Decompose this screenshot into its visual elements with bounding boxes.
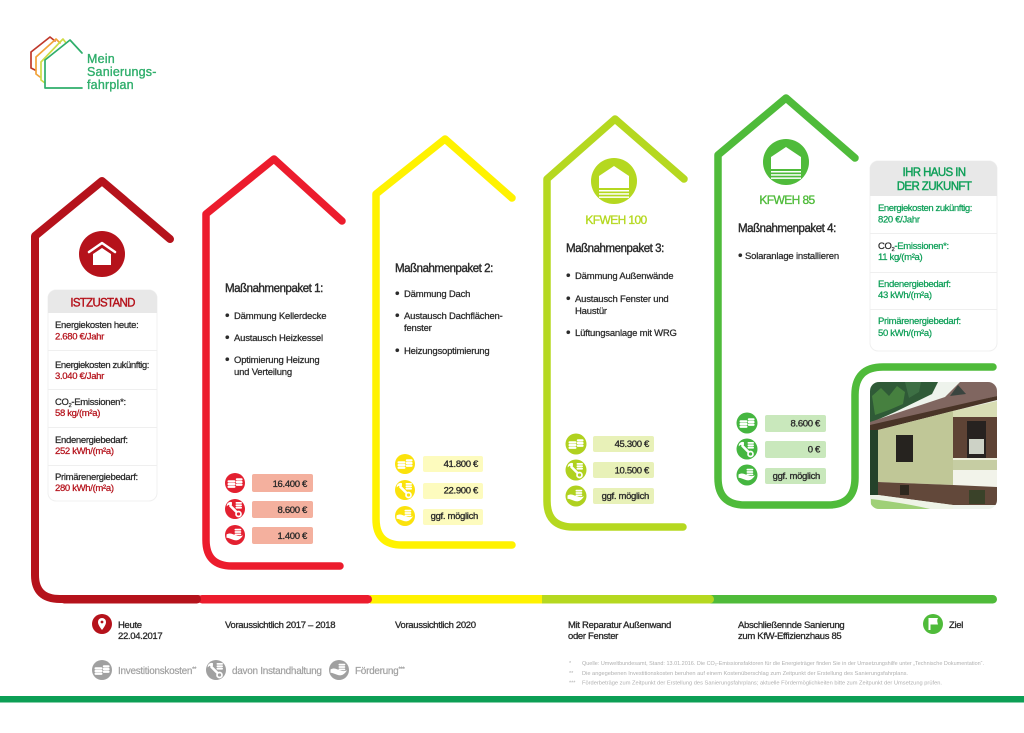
panel: package 3 [566,158,677,506]
cost: maintenance [395,480,483,500]
row: CO2: 58 kg/(m²a) [55,408,100,419]
measures list: Dämmung Außenwände [575,271,673,282]
cost: subsidy: 1.400 € [278,531,308,542]
timeline: package 1 date: Voraussichtlich 2017 – 2018 [225,620,335,631]
house outline: package 1 [206,159,342,566]
row: primary energy: 280 kWh/(m²a) [55,483,114,494]
footnotes: Förderbeträge zum Zeitpunkt der Erstellung des Sanierungsfahrplans; aktuelle Fördermöglichkeiten bitte zum Zeitpunkt der Umsetzung prüfen. [582,680,942,686]
measures list [225,308,326,378]
row: final energy: 252 kWh/(m²a) [55,446,114,457]
row: primary energy: Primärenergiebedarf: [878,316,961,327]
row: CO2: CO [55,397,69,408]
measures list: Solaranlage installieren [745,251,839,262]
measures list: Austausch Heizkessel [234,333,323,344]
row: future energy cost: 3.040 €/Jahr [55,371,104,382]
row: final energy [55,435,128,457]
panel heading: ISTZUSTAND [70,298,135,310]
row: energy cost today [55,320,138,342]
row: final energy: Endenergiebedarf: [55,435,128,446]
cost: investment: 16.400 € [273,479,308,490]
row: future energy cost [55,360,149,382]
measures list: • [225,352,230,366]
cost: subsidy [395,506,483,526]
house outline: package 4 [718,98,993,505]
cost: maintenance [225,499,313,519]
measures list [738,248,839,262]
panel: current state [48,290,157,501]
measures list: • [395,308,400,322]
row: energy cost today: Energiekosten heute: [55,320,138,331]
measures list: Lüftungsanlage mit WRG [575,328,677,339]
cost: investment [566,434,654,454]
cost: subsidy [736,464,826,486]
measures list: • [395,286,400,300]
timeline: today: 22.04.2017 [118,631,162,642]
row: primary energy: 50 kWh/(m²a) [878,328,932,339]
panel: future house [870,161,997,351]
cost: investment: 8.600 € [791,418,821,430]
cost: subsidy [225,525,313,545]
measures list: • [566,268,571,282]
row: CO2: -Emissionen*: [894,241,949,252]
legend: investment: ** [192,667,197,673]
measures list: • [566,290,571,306]
house outline: package 3 [547,119,684,527]
cost: maintenance: 0 € [808,444,821,456]
house outline: package 2 [376,139,512,545]
legend: subsidy: Förderung [355,666,398,677]
row: primary energy: Primärenergiebedarf: [55,472,138,483]
row: CO2 [878,241,949,263]
row: final energy [878,279,951,301]
measures list: Heizungsoptimierung [404,346,489,357]
measures list: und Verteilung [234,367,292,378]
cost: investment [736,412,826,434]
timeline: package 3 date [568,620,671,642]
measures list: • [225,308,230,322]
cost: subsidy: ggf. möglich [431,511,478,522]
cost: subsidy: ggf. möglich [773,471,820,482]
icon: efficiency house 100 [591,158,637,204]
heading: Maßnahmenpaket 1: [225,283,323,295]
panel: package 1 [225,283,326,545]
measures list [566,268,677,340]
measures list: Dämmung Kellerdecke [234,311,326,322]
heading: Maßnahmenpaket 2: [395,263,493,275]
measures list [395,286,503,358]
measures list: • [225,330,230,344]
timeline: package 4 date: Abschließennde Sanierung [738,620,844,631]
timeline: package 2 date: Voraussichtlich 2020 [395,620,476,631]
row: future energy cost: Energiekosten zukünftig: [878,203,972,214]
measures list: Optimierung Heizung [234,355,319,366]
timeline: package 3 date: Mit Reparatur Außenwand [568,620,671,631]
footnotes: ** [569,671,574,677]
footnotes: *** [569,680,576,686]
row: energy cost today: 2.680 €/Jahr [55,332,104,342]
house outline: current state [35,181,198,599]
icon: location pin [92,614,112,634]
measures list: • [566,324,571,340]
footnotes: Die angegebenen Investitionskosten beruhen auf einem Kostenüberschlag zum Zeitpunkt der Erstellung des Sanierungsfahrplans. [582,671,908,677]
timeline: package 4 date [738,620,844,642]
photo: renovated house [870,382,997,509]
footer bar [0,696,1024,702]
row: future energy cost [878,203,972,226]
legend [92,660,406,680]
efficiency label: KFWEH 100 [585,213,648,227]
cost: maintenance: 8.600 € [278,505,308,516]
logo: Sanierungs- [87,65,157,79]
panel: package 4 [736,139,839,486]
cost: maintenance: 22.900 € [444,486,479,496]
row: primary energy [55,472,138,494]
legend: subsidy: *** [398,667,406,673]
measures list: Dämmung Dach [404,289,470,300]
cost: investment: 45.300 € [615,439,650,450]
legend: subsidy [329,660,406,680]
timeline: today [92,614,162,642]
row: future energy cost: 820 €/Jahr [878,214,920,226]
measures list: Haustür [575,306,607,317]
timeline: package 3 date: oder Fenster [568,631,618,642]
timeline bar [60,595,997,604]
panel heading [897,167,972,193]
panel heading: DER ZUKUNFT [897,181,972,193]
cost: maintenance: 10.500 € [615,466,650,476]
row: future energy cost: Energiekosten zukünftig: [55,360,149,371]
panel heading: IHR HAUS IN [902,167,966,179]
cost: investment: 41.800 € [444,459,479,470]
row: CO2: -Emissionen*: [71,397,126,408]
row: final energy: Endenergiebedarf: [878,279,951,290]
row: CO2: 2 [892,247,895,253]
measures list: fenster [404,323,432,334]
panel: package 2 [395,263,503,526]
row: final energy: 43 kWh/(m²a) [878,290,932,301]
measures list: • [738,248,743,262]
icon: flag [923,614,943,634]
cost: maintenance [566,460,654,480]
cost: subsidy: ggf. möglich [602,491,649,502]
legend: maintenance [206,660,322,680]
logo: Mein [87,52,115,66]
footnotes [569,661,984,686]
cost: subsidy [566,486,654,506]
row: primary energy [878,316,961,339]
row: CO2: 11 kg/(m²a) [878,252,922,263]
timeline: today: Heute [118,620,142,631]
measures list: Austausch Dachflächen- [404,311,503,322]
icon: efficiency house 85 [763,139,809,185]
cost: investment [225,473,313,493]
cost: investment [395,454,483,474]
logo: fahrplan [87,78,134,92]
measures list: • [395,342,400,358]
row: CO2: 2 [69,403,72,409]
heading: Maßnahmenpaket 4: [738,223,836,235]
heading: Maßnahmenpaket 3: [566,243,664,255]
row: CO2 [55,397,126,419]
row: CO2: CO [878,241,892,252]
cost: maintenance [736,438,826,460]
timeline: goal [923,614,963,634]
footnotes: * [569,661,572,667]
logo [31,37,157,92]
icon: house [79,231,125,277]
legend: maintenance: davon Instandhaltung [232,666,322,677]
legend: investment: Investitionskosten [118,666,192,677]
footnotes: Quelle: Umweltbundesamt, Stand: 13.01.2016. Die CO₂-Emissionsfaktoren für die Energieträger finden Sie in der Umsetzungshilfe unter „Technische Dokumentation“. [582,661,984,667]
measures list: Austausch Fenster und [575,294,668,305]
timeline: goal: Ziel [949,620,963,631]
legend: investment [92,660,197,680]
efficiency label: KFWEH 85 [759,193,816,207]
timeline: package 4 date: zum KfW-Effizienzhaus 85 [738,631,841,642]
